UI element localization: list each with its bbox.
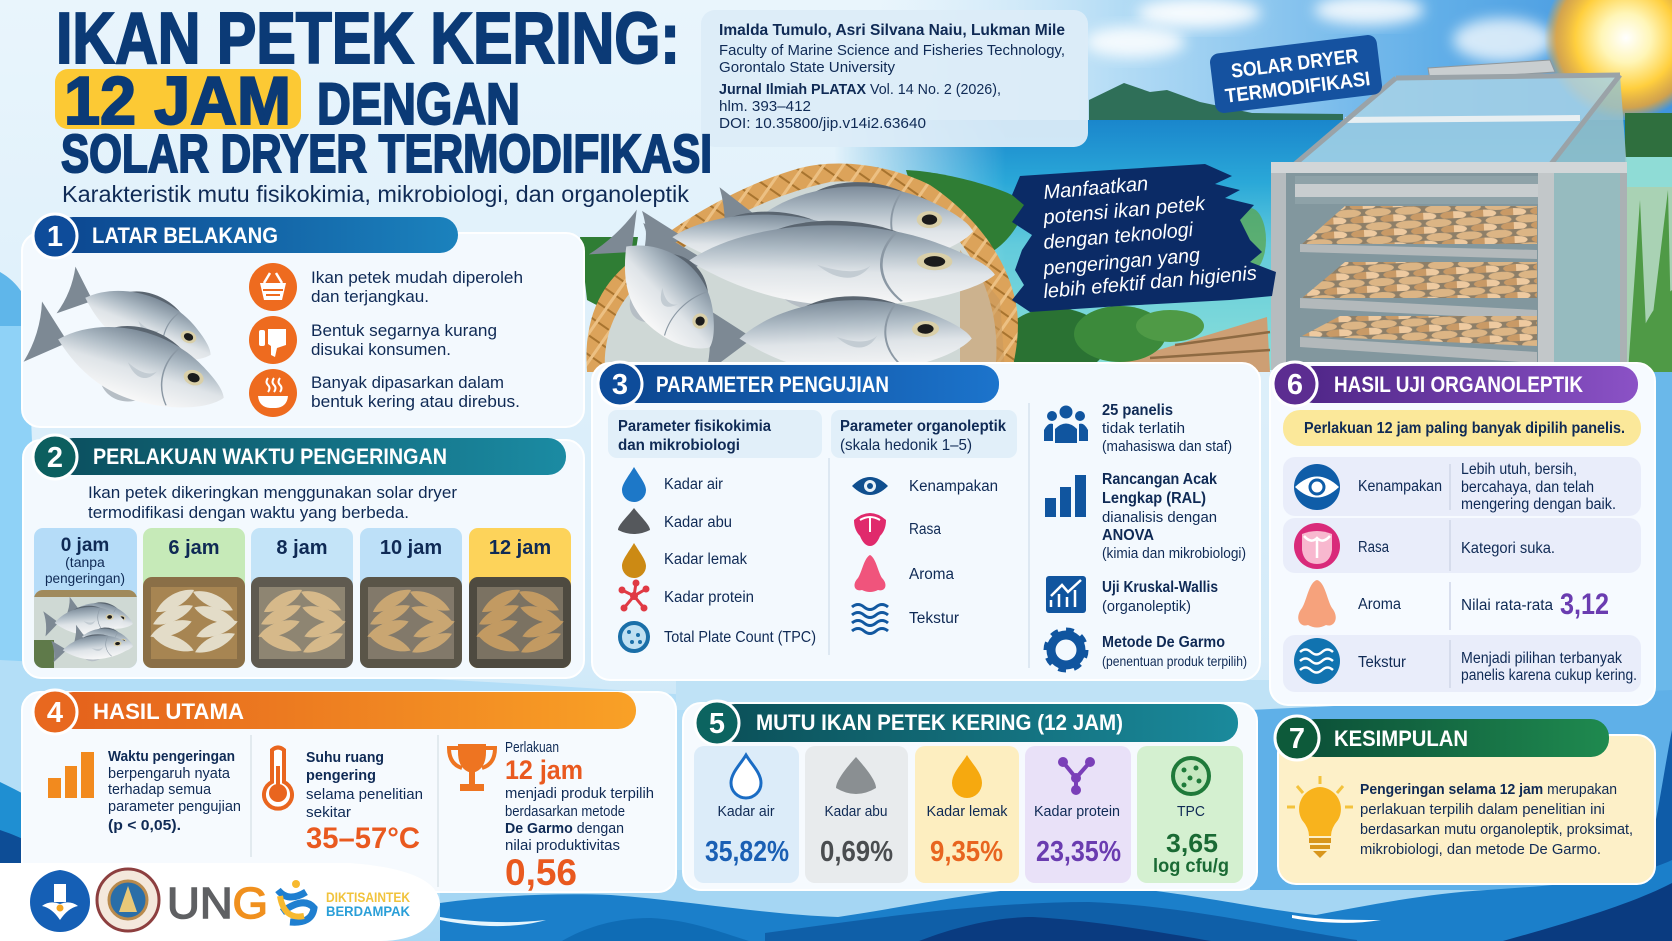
heading 6: HASIL UJI ORGANOLEPTIK	[1334, 372, 1583, 397]
item: kadar lemak	[622, 543, 747, 578]
panel 1: latar belakang	[21, 214, 584, 429]
metric: TPC: log cfu/g	[1153, 856, 1229, 877]
result: pengaruh nyata: (p < 0,05).	[108, 817, 181, 834]
info box: authors and journal	[701, 10, 1088, 147]
brush callout: manfaatkan potensi: potensi ikan petek	[1042, 193, 1207, 229]
title	[55, 0, 712, 207]
item: TPC: Total Plate Count (TPC)	[664, 629, 816, 646]
method: RAL and ANOVA: dianalisis dengan	[1102, 509, 1217, 526]
row: tekstur: Tekstur	[1358, 654, 1406, 671]
info box: authors and journal: Faculty of Marine Science and Fisheries Technology,	[719, 42, 1065, 59]
text: dipasarkan kering	[311, 373, 520, 411]
logo: Diktisaintek Berdampak: BERDAMPAK	[326, 904, 410, 919]
card: 0 jam	[34, 528, 137, 668]
card: 0 jam: (tanpa	[65, 554, 105, 570]
text: mudah diperoleh: dan terjangkau.	[311, 287, 429, 306]
text: dipasarkan kering: bentuk kering atau direbus.	[311, 392, 520, 411]
card: 10 jam	[360, 528, 462, 668]
result: suhu: 35–57°C	[306, 822, 420, 855]
row: kenampakan: mengering dengan baik.	[1461, 496, 1616, 513]
brush callout: manfaatkan potensi	[1012, 164, 1276, 312]
heading 7: KESIMPULAN	[1334, 726, 1468, 751]
photo scene: sky, sea and mountains	[841, 0, 1672, 370]
info box: authors and journal: hlm. 393–412	[719, 98, 811, 115]
item: rasa	[854, 513, 941, 546]
method: Kruskal-Wallis: (organoleptik)	[1102, 598, 1191, 615]
sub-heading: fisikokimia	[608, 410, 822, 458]
panel 5: mutu ikan petek kering	[683, 701, 1257, 890]
metric: kadar air	[694, 746, 799, 883]
metric: kadar lemak: Kadar lemak	[926, 803, 1008, 820]
method: RAL and ANOVA: ANOVA	[1102, 527, 1154, 544]
title: IKAN PETEK KERING:	[56, 0, 680, 79]
row: aroma	[1298, 580, 1609, 628]
intro text: termodifikasi dengan waktu yang berbeda.	[88, 503, 409, 522]
card: 8 jam: 8 jam	[276, 537, 328, 559]
row: aroma: Aroma	[1358, 596, 1401, 613]
heading 1: 1	[47, 221, 63, 253]
heading 1: LATAR BELAKANG	[92, 223, 278, 248]
card: 6 jam	[143, 528, 245, 668]
basket of fresh ikan petek	[580, 163, 1026, 383]
foliage and wooden dock	[1003, 113, 1672, 376]
result: produk terpilih: berdasarkan metode	[505, 803, 625, 820]
heading 7	[1275, 716, 1609, 760]
item: aroma: Aroma	[909, 566, 954, 583]
result: produk terpilih: menjadi produk terpilih	[505, 785, 654, 802]
metric: kadar protein: 23,35%	[1036, 836, 1121, 868]
metric: TPC: TPC	[1177, 803, 1205, 820]
heading 3	[598, 362, 999, 406]
method: 25 panelis: (mahasiswa dan staf)	[1102, 438, 1232, 455]
conclusion text: Pengeringan selama 12 jam merupakan	[1360, 781, 1617, 798]
row: kenampakan	[1294, 461, 1616, 513]
item: kadar air: Kadar air	[664, 476, 723, 493]
text: kurang disukai	[311, 321, 497, 359]
metric: kadar protein: Kadar protein	[1034, 803, 1120, 820]
metric: kadar lemak	[915, 746, 1019, 883]
item: rasa: Rasa	[909, 521, 941, 538]
item: kadar lemak: Kadar lemak	[664, 551, 747, 568]
item: kenampakan	[852, 477, 998, 495]
method: De Garmo: (penentuan produk terpilih)	[1102, 653, 1247, 669]
label: solar dryer termodifikasi: TERMODIFIKASI	[1224, 68, 1372, 108]
result: pengaruh nyata: terhadap semua	[108, 781, 212, 798]
logo: Diktisaintek Berdampak: DIKTISAINTEK	[326, 890, 410, 905]
icon: steaming bowl	[249, 369, 297, 417]
method: RAL and ANOVA: (kimia dan mikrobiologi)	[1102, 546, 1246, 562]
solar dryer cabinet	[1271, 60, 1627, 370]
method: RAL and ANOVA: Rancangan Acak	[1102, 471, 1217, 488]
method: 25 panelis: tidak terlatih	[1102, 420, 1185, 437]
text: mudah diperoleh	[311, 268, 523, 306]
icon: thumbs down	[249, 316, 297, 364]
title: DENGAN	[317, 72, 520, 137]
item: aroma	[855, 555, 954, 592]
result: produk terpilih: Perlakuan	[505, 739, 559, 756]
metric: TPC	[1137, 746, 1243, 883]
info box: authors and journal: Imalda Tumulo, Asri Silvana Naiu, Lukman Mile	[719, 22, 1065, 39]
row: tekstur: Menjadi pilihan terbanyak	[1461, 650, 1622, 667]
brush callout: manfaatkan potensi: dengan teknologi	[1043, 219, 1194, 254]
text: kurang disukai: Bentuk segarnya kurang	[311, 321, 497, 340]
row: kenampakan: Kenampakan	[1358, 478, 1442, 495]
sub-heading: fisikokimia: Parameter fisikokimia	[618, 418, 771, 435]
heading 3: 3	[612, 369, 628, 401]
title: Karakteristik mutu fisikokimia, mikrobiologi, dan organoleptik	[62, 181, 690, 207]
item: TPC	[620, 623, 816, 651]
title: SOLAR DRYER TERMODIFIKASI	[61, 124, 712, 184]
card: 10 jam: 10 jam	[380, 537, 442, 559]
label: solar dryer termodifikasi	[1209, 34, 1383, 114]
heading 2: 2	[47, 442, 63, 474]
logo strip	[0, 863, 440, 941]
brush callout: manfaatkan potensi: lebih efektif dan higienis	[1043, 262, 1258, 303]
method: De Garmo	[1046, 630, 1247, 670]
method: RAL and ANOVA: Lengkap (RAL)	[1102, 490, 1206, 507]
panel 6: hasil uji organoleptik	[1270, 362, 1655, 705]
row: kenampakan: bercahaya, dan telah	[1461, 479, 1594, 496]
conclusion text: berdasarkan mutu organoleptik, proksimat,	[1360, 821, 1633, 838]
label: solar dryer termodifikasi: SOLAR DRYER	[1230, 45, 1360, 83]
method: De Garmo: Metode De Garmo	[1102, 634, 1225, 651]
item: kenampakan: Kenampakan	[909, 478, 998, 495]
intro text: Ikan petek dikeringkan menggunakan solar dryer	[88, 483, 457, 502]
card: 6 jam: 6 jam	[168, 537, 220, 559]
item: tekstur: Tekstur	[909, 610, 959, 627]
result: suhu	[264, 748, 423, 855]
item: kadar abu: Kadar abu	[664, 514, 732, 531]
sun	[1544, 0, 1672, 120]
heading 7: 7	[1289, 723, 1305, 755]
item: kadar abu	[618, 508, 732, 534]
result: produk terpilih: 12 jam	[505, 755, 583, 785]
logo: kemdikbud shield	[30, 870, 90, 932]
result: suhu: Suhu ruang	[306, 749, 384, 766]
heading 6: 6	[1287, 369, 1303, 401]
heading 5: 5	[709, 708, 725, 740]
result: pengaruh nyata: berpengaruh nyata	[108, 765, 231, 782]
text: mudah diperoleh: Ikan petek mudah diperoleh	[311, 268, 523, 287]
row: aroma: Nilai rata-rata	[1461, 597, 1553, 614]
result: produk terpilih: nilai produktivitas	[505, 837, 620, 854]
card: 0 jam: pengeringan)	[45, 570, 125, 586]
panel 3: parameter pengujian	[592, 362, 1260, 680]
heading 5: MUTU IKAN PETEK KERING (12 JAM)	[756, 710, 1123, 735]
heading 1	[33, 214, 458, 258]
metric: kadar abu: 0,69%	[820, 836, 893, 868]
metric: kadar air: 35,82%	[705, 836, 789, 868]
result: pengaruh nyata	[48, 748, 241, 834]
metric: kadar air: Kadar air	[718, 803, 774, 820]
row: tekstur	[1294, 638, 1637, 684]
info box: authors and journal: Jurnal Ilmiah PLATAX Vol. 14 No. 2 (2026),	[719, 81, 1001, 98]
info box: authors and journal: Gorontalo State University	[719, 59, 896, 76]
card: 0 jam: 0 jam	[61, 535, 109, 556]
sub-heading: fisikokimia: dan mikrobiologi	[618, 437, 740, 454]
row: kenampakan: Lebih utuh, bersih,	[1461, 461, 1577, 478]
conclusion text: mikrobiologi, dan metode De Garmo.	[1360, 841, 1601, 858]
icon: light bulb	[1287, 776, 1353, 858]
heading 4	[33, 690, 636, 734]
result: suhu: pengering	[306, 767, 376, 784]
logo: Diktisaintek Berdampak	[278, 880, 410, 922]
row: rasa	[1294, 523, 1555, 569]
fish photo	[21, 263, 236, 429]
sub-heading: organoleptik: (skala hedonik 1–5)	[840, 437, 972, 454]
metric: kadar protein	[1025, 746, 1131, 883]
row: tekstur: panelis karena cukup kering.	[1461, 667, 1637, 684]
row: rasa: Kategori suka.	[1461, 540, 1555, 557]
sub-heading: organoleptik: Parameter organoleptik	[840, 418, 1006, 435]
item: tekstur	[852, 604, 959, 634]
panel 4: hasil utama	[22, 690, 676, 893]
heading 3: PARAMETER PENGUJIAN	[656, 372, 889, 397]
text: kurang disukai: disukai konsumen.	[311, 340, 451, 359]
metric: kadar lemak: 9,35%	[930, 836, 1003, 868]
card: 12 jam	[469, 528, 571, 668]
method: Kruskal-Wallis: Uji Kruskal-Wallis	[1102, 579, 1218, 596]
result: pengaruh nyata: parameter pengujian	[108, 798, 241, 815]
item: kadar protein	[618, 580, 754, 612]
heading 4: 4	[47, 697, 63, 729]
row: aroma: 3,12	[1560, 588, 1609, 621]
result: produk terpilih: 0,56	[505, 852, 577, 893]
sub-heading: organoleptik	[831, 410, 1017, 458]
heading 6	[1273, 362, 1638, 406]
title: 12 JAM	[64, 63, 291, 139]
info box: authors and journal: DOI: 10.35800/jip.v14i2.63640	[719, 115, 926, 132]
heading 5	[695, 701, 1238, 745]
method: 25 panelis	[1044, 402, 1232, 455]
method: RAL and ANOVA	[1045, 471, 1246, 562]
result: produk terpilih: De Garmo dengan	[505, 820, 624, 837]
heading 2: PERLAKUAN WAKTU PENGERINGAN	[93, 444, 447, 469]
method: 25 panelis: 25 panelis	[1102, 402, 1173, 419]
card: 8 jam	[251, 528, 353, 668]
card: 12 jam: 12 jam	[489, 537, 551, 559]
metric: kadar abu: Kadar abu	[824, 803, 888, 820]
icon: basket	[249, 263, 297, 311]
conclusion text: perlakuan terpilih dalam penelitian ini	[1360, 801, 1605, 818]
highlight pill: Perlakuan 12 jam paling banyak dipilih panelis.	[1304, 420, 1625, 437]
item: kadar protein: Kadar protein	[664, 589, 754, 606]
logo: university seal	[97, 869, 159, 931]
highlight pill	[1283, 410, 1641, 446]
brush callout: manfaatkan potensi: pengeringan yang	[1042, 244, 1201, 280]
item: kadar air	[622, 467, 723, 502]
heading 4: HASIL UTAMA	[93, 699, 244, 724]
result: produk terpilih	[449, 739, 654, 893]
brush callout: manfaatkan potensi: Manfaatkan	[1043, 173, 1149, 204]
method: Kruskal-Wallis	[1046, 576, 1218, 615]
panel 7: kesimpulan	[1275, 716, 1655, 884]
metric: kadar abu	[805, 746, 908, 883]
text: dipasarkan kering: Banyak dipasarkan dalam	[311, 373, 504, 392]
logo: UNG wordmark: UNG	[167, 879, 268, 928]
heading 2	[33, 435, 566, 479]
result: suhu: selama penelitian	[306, 786, 423, 803]
metric: TPC: 3,65	[1166, 828, 1218, 858]
panel 2: perlakuan waktu pengeringan	[23, 435, 584, 678]
row: rasa: Rasa	[1358, 539, 1389, 556]
conclusion text	[1360, 781, 1633, 858]
result: pengaruh nyata: Waktu pengeringan	[108, 748, 235, 765]
result: suhu: sekitar	[306, 804, 351, 821]
intro text	[88, 483, 457, 522]
